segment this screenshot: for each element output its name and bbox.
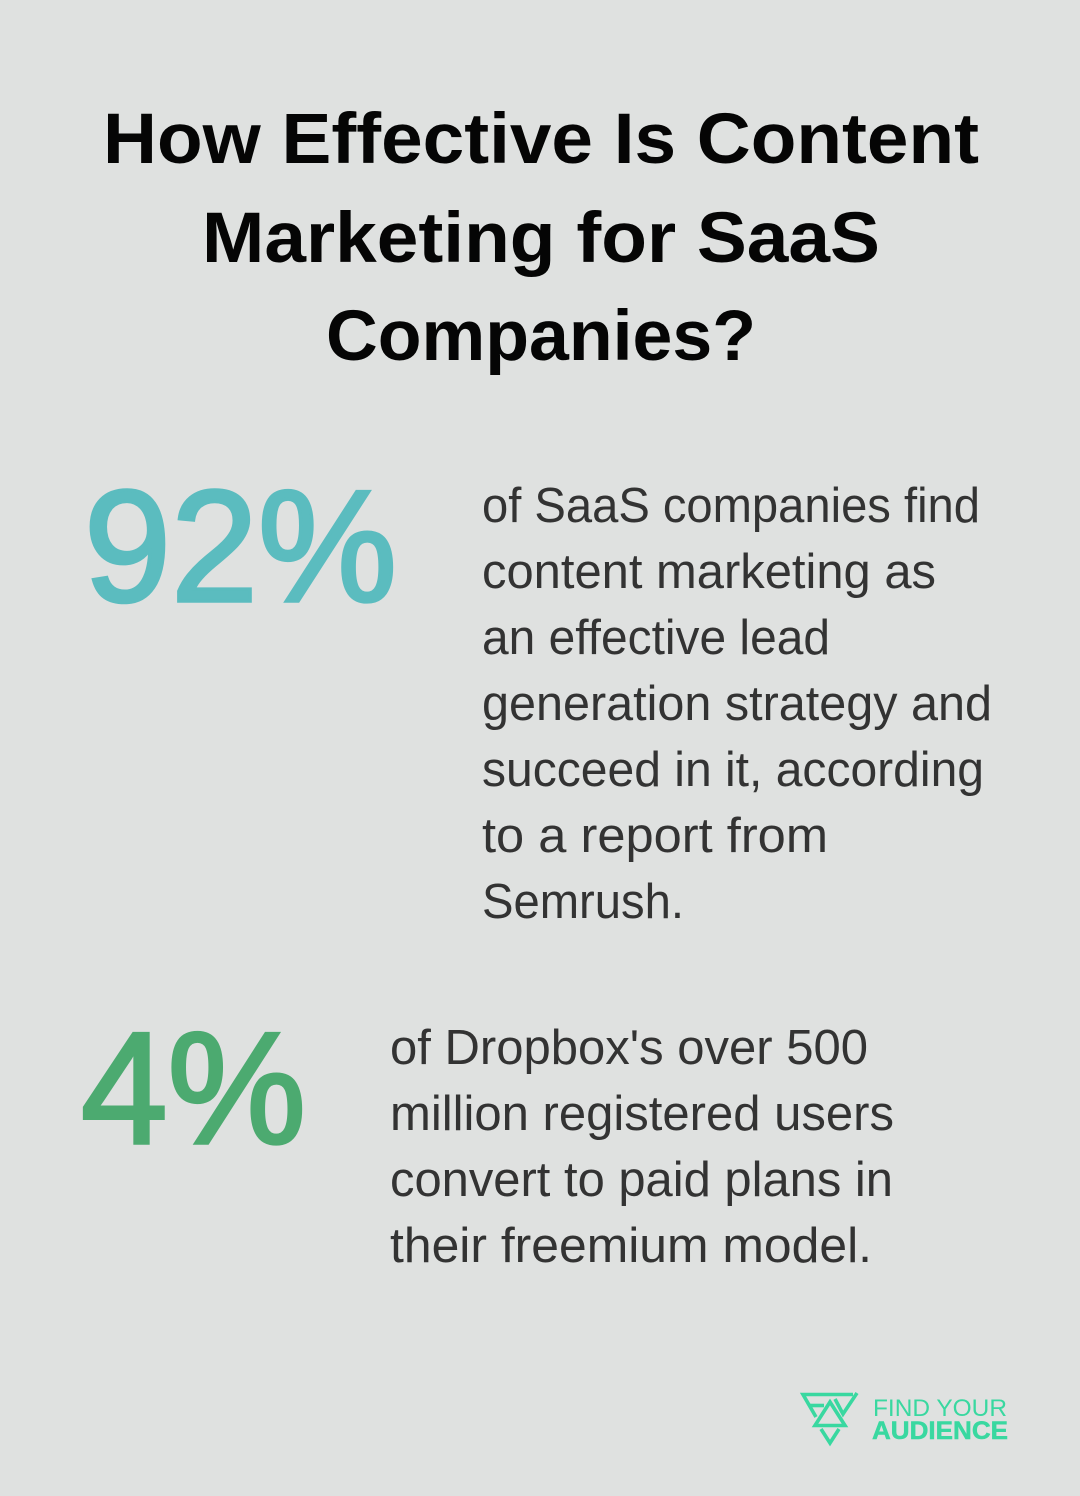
title: How Effective Is Content xyxy=(103,100,979,179)
statistic: 4%: 4% xyxy=(81,999,306,1177)
description: 4% statistic: of Dropbox's over 500 xyxy=(390,1021,868,1075)
description: 4% statistic: convert to paid plans in xyxy=(390,1153,893,1207)
description: 4% statistic xyxy=(390,1021,894,1273)
description: 4% statistic: million registered users xyxy=(390,1087,894,1141)
title: Marketing for SaaS xyxy=(202,199,880,278)
description: 92% statistic: to a report from xyxy=(482,809,828,863)
description: 92% statistic: succeed in it, according xyxy=(482,743,984,797)
logo: Find Your Audience xyxy=(803,1393,1008,1445)
description: 92% statistic: of SaaS companies find xyxy=(482,479,980,533)
title xyxy=(103,100,979,376)
description: 92% statistic: generation strategy and xyxy=(482,677,992,731)
description: 92% statistic: content marketing as xyxy=(482,545,936,599)
brand name: FIND YOUR xyxy=(873,1395,1007,1422)
description: 4% statistic: their freemium model. xyxy=(390,1219,872,1273)
icon: triangular logo mark xyxy=(803,1393,857,1443)
description: 92% statistic: an effective lead xyxy=(482,611,830,665)
description: 92% statistic: Semrush. xyxy=(482,875,684,929)
title: Companies? xyxy=(326,297,756,376)
brand name xyxy=(872,1395,1008,1445)
brand name: AUDIENCE xyxy=(872,1417,1008,1445)
statistic: 92%: 92% xyxy=(84,457,397,635)
description: 92% statistic xyxy=(482,479,992,929)
